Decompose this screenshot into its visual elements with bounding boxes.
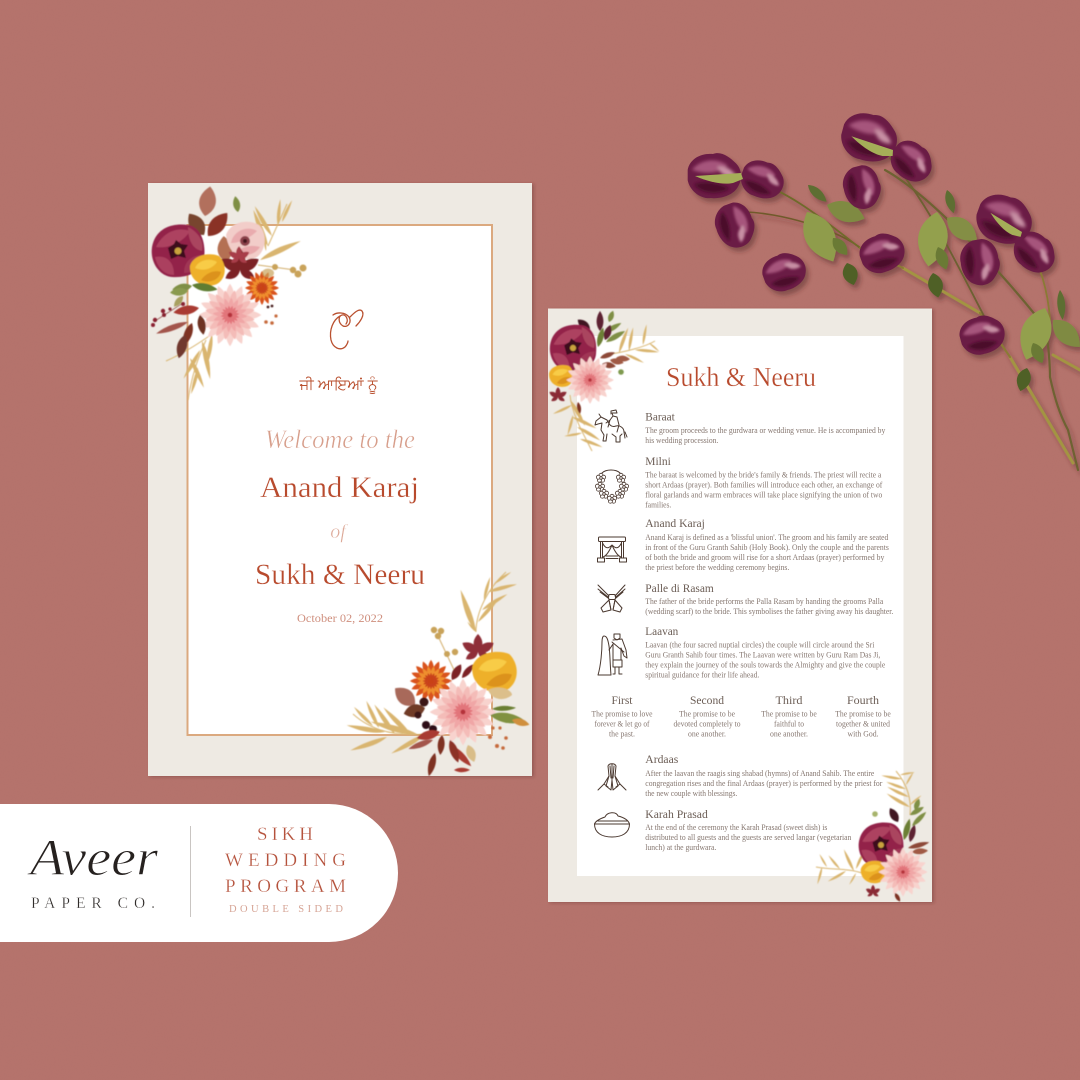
promise column: First	[592, 693, 653, 739]
floral: back bottom right	[816, 771, 930, 903]
program card: front	[148, 183, 532, 776]
product title: SIKH	[257, 824, 313, 845]
punjabi greeting: ਜੀ ਆਇਆਂ ਨੂੰ	[298, 376, 378, 394]
heading and text: Anand Karaj: of both the bride and groom will rise for a short Ardaas (prayer) performed by	[645, 553, 884, 562]
promise column: Second: one another.	[688, 730, 726, 739]
heading and text: Karah Prasad: distributed to all guests and the guests are served langar (vegetarian	[645, 833, 851, 842]
heading and text: Anand Karaj: Anand Karaj	[645, 516, 705, 530]
heading and text: Palle di Rasam	[645, 581, 893, 616]
heading and text: Anand Karaj: the priest before the wedding ceremony begins.	[645, 563, 789, 572]
event name: Anand Karaj	[260, 472, 419, 504]
heading and text: Milni: Milni	[645, 454, 671, 468]
heading and text: Palle di Rasam: (wedding scarf) to the bride. This symbolises the father giving away his daughter.	[645, 607, 893, 616]
icon: flower garland	[595, 470, 629, 503]
front inner panel with gold border	[188, 225, 492, 735]
heading and text: Laavan: they explain the journey of the souls towards the Almighty and give the couple	[645, 661, 886, 670]
heading and text: Baraat	[645, 410, 885, 445]
promise column: Second	[674, 693, 740, 739]
promise column: First: forever & let go of	[594, 720, 650, 729]
heading and text: Milni	[645, 454, 883, 510]
brand sub-name: PAPER CO.	[31, 895, 155, 912]
promise column: Fourth: together & united	[836, 720, 890, 729]
spray leaves	[794, 182, 1080, 393]
heading and text: Laavan: spiritual guidance for their life ahead.	[645, 671, 759, 680]
promise column: Fourth: The promise to be	[835, 710, 891, 719]
heading and text: Ardaas: After the laavan the raagis sing shabad (hymns) of Anand Sahib. The entire	[645, 769, 875, 778]
spray rose buds	[688, 107, 1063, 359]
promise column: Second: devoted completely to	[674, 720, 740, 729]
welcome script: Welcome to the	[265, 425, 415, 454]
double sided note: DOUBLE SIDED	[229, 904, 343, 915]
heading and text: Karah Prasad: lunch) at the gurdwara.	[645, 843, 716, 852]
brand script logo: Aveer	[27, 830, 159, 887]
floral: front bottom right	[346, 571, 530, 777]
promise column: Fourth	[835, 693, 891, 739]
khanda / ik onkar symbol	[330, 310, 363, 349]
dried rose spray	[688, 107, 1080, 470]
heading and text: Baraat: Baraat	[645, 410, 675, 424]
heading and text: Palle di Rasam: The father of the bride performs the Palla Rasam by handing the grooms Palla	[645, 597, 884, 606]
icon: karah prasad bowl	[594, 813, 630, 837]
heading and text: Karah Prasad	[645, 807, 851, 852]
floral: front top left	[151, 185, 306, 400]
icon: wedding canopy	[598, 537, 626, 562]
heading and text: Anand Karaj: in front of the Guru Granth Sahib (Holy Book). Only the couple and the parents	[645, 543, 889, 552]
back inner white panel	[577, 336, 904, 876]
heading and text: Laavan: Guru Granth Sahib four times. The Laavan were written by Guru Ram Das Ji,	[645, 651, 880, 660]
heading and text: Ardaas: the new couple with blessings.	[645, 789, 737, 798]
promise column: Second: The promise to be	[679, 710, 735, 719]
product title: WEDDING	[225, 850, 346, 871]
floral: back top left	[548, 310, 660, 451]
heading and text: Ardaas: Ardaas	[645, 752, 679, 766]
program card: back	[548, 308, 932, 902]
heading and text: Milni: families.	[645, 501, 671, 510]
brand badge	[0, 804, 398, 942]
of script: of	[330, 521, 348, 543]
promise column: Third: Third	[776, 693, 802, 707]
heading and text: Ardaas: congregation rises and the final Ardaas (prayer) is performed by the priest for	[645, 779, 883, 788]
promise column: Third: faithful to	[774, 720, 804, 729]
heading and text: Anand Karaj: Anand Karaj is defined as a 'blissful union'. The groom and his family are seated	[645, 533, 888, 542]
heading and text: Laavan: Laavan	[645, 624, 678, 638]
promise column: First: The promise to love	[592, 710, 653, 719]
heading and text: Baraat: his wedding procession.	[645, 436, 718, 445]
heading and text: Milni: floral garlands and warm embraces will take place signifying the union of two	[645, 491, 882, 500]
heading and text: Milni: short Ardaas (prayer). Both families will introduce each other, an exchange of	[645, 481, 883, 490]
promise column: Fourth: with God.	[848, 730, 878, 739]
spray stems	[742, 158, 1080, 470]
heading and text: Baraat: The groom proceeds to the gurdwara or wedding venue. He is accompanied by	[645, 426, 885, 435]
heading and text: Laavan: Laavan (the four sacred nuptial circles) the couple will circle around the Sri	[645, 641, 875, 650]
heading and text: Karah Prasad: At the end of the ceremony the Karah Prasad (sweet dish) is	[645, 823, 827, 832]
icon: praying hands	[598, 764, 626, 790]
product title: PROGRAM	[225, 876, 346, 897]
couple names: Sukh & Neeru	[255, 558, 425, 591]
icon: palla scarf	[598, 585, 625, 612]
promise column: First: the past.	[609, 730, 635, 739]
product title	[225, 824, 346, 897]
promise column: Third: one another.	[770, 730, 808, 739]
promise column: Third	[761, 693, 817, 739]
back card title: Sukh & Neeru	[666, 362, 816, 392]
promise column: Second: Second	[690, 693, 724, 707]
promise column: Fourth: Fourth	[847, 693, 879, 707]
heading and text: Karah Prasad: Karah Prasad	[645, 807, 708, 821]
promise column: Third: The promise to be	[761, 710, 817, 719]
heading and text: Ardaas	[645, 752, 883, 798]
heading and text: Milni: The baraat is welcomed by the bride's family & friends. The priest will recite a	[645, 471, 882, 480]
icon: groom on horse	[595, 410, 627, 442]
date: October 02, 2022	[297, 611, 383, 625]
heading and text: Laavan	[645, 624, 886, 680]
heading and text: Palle di Rasam: Palle di Rasam	[645, 581, 714, 595]
icon: couple	[598, 634, 627, 675]
heading and text: Anand Karaj	[645, 516, 889, 572]
promise column: First: First	[612, 693, 633, 707]
